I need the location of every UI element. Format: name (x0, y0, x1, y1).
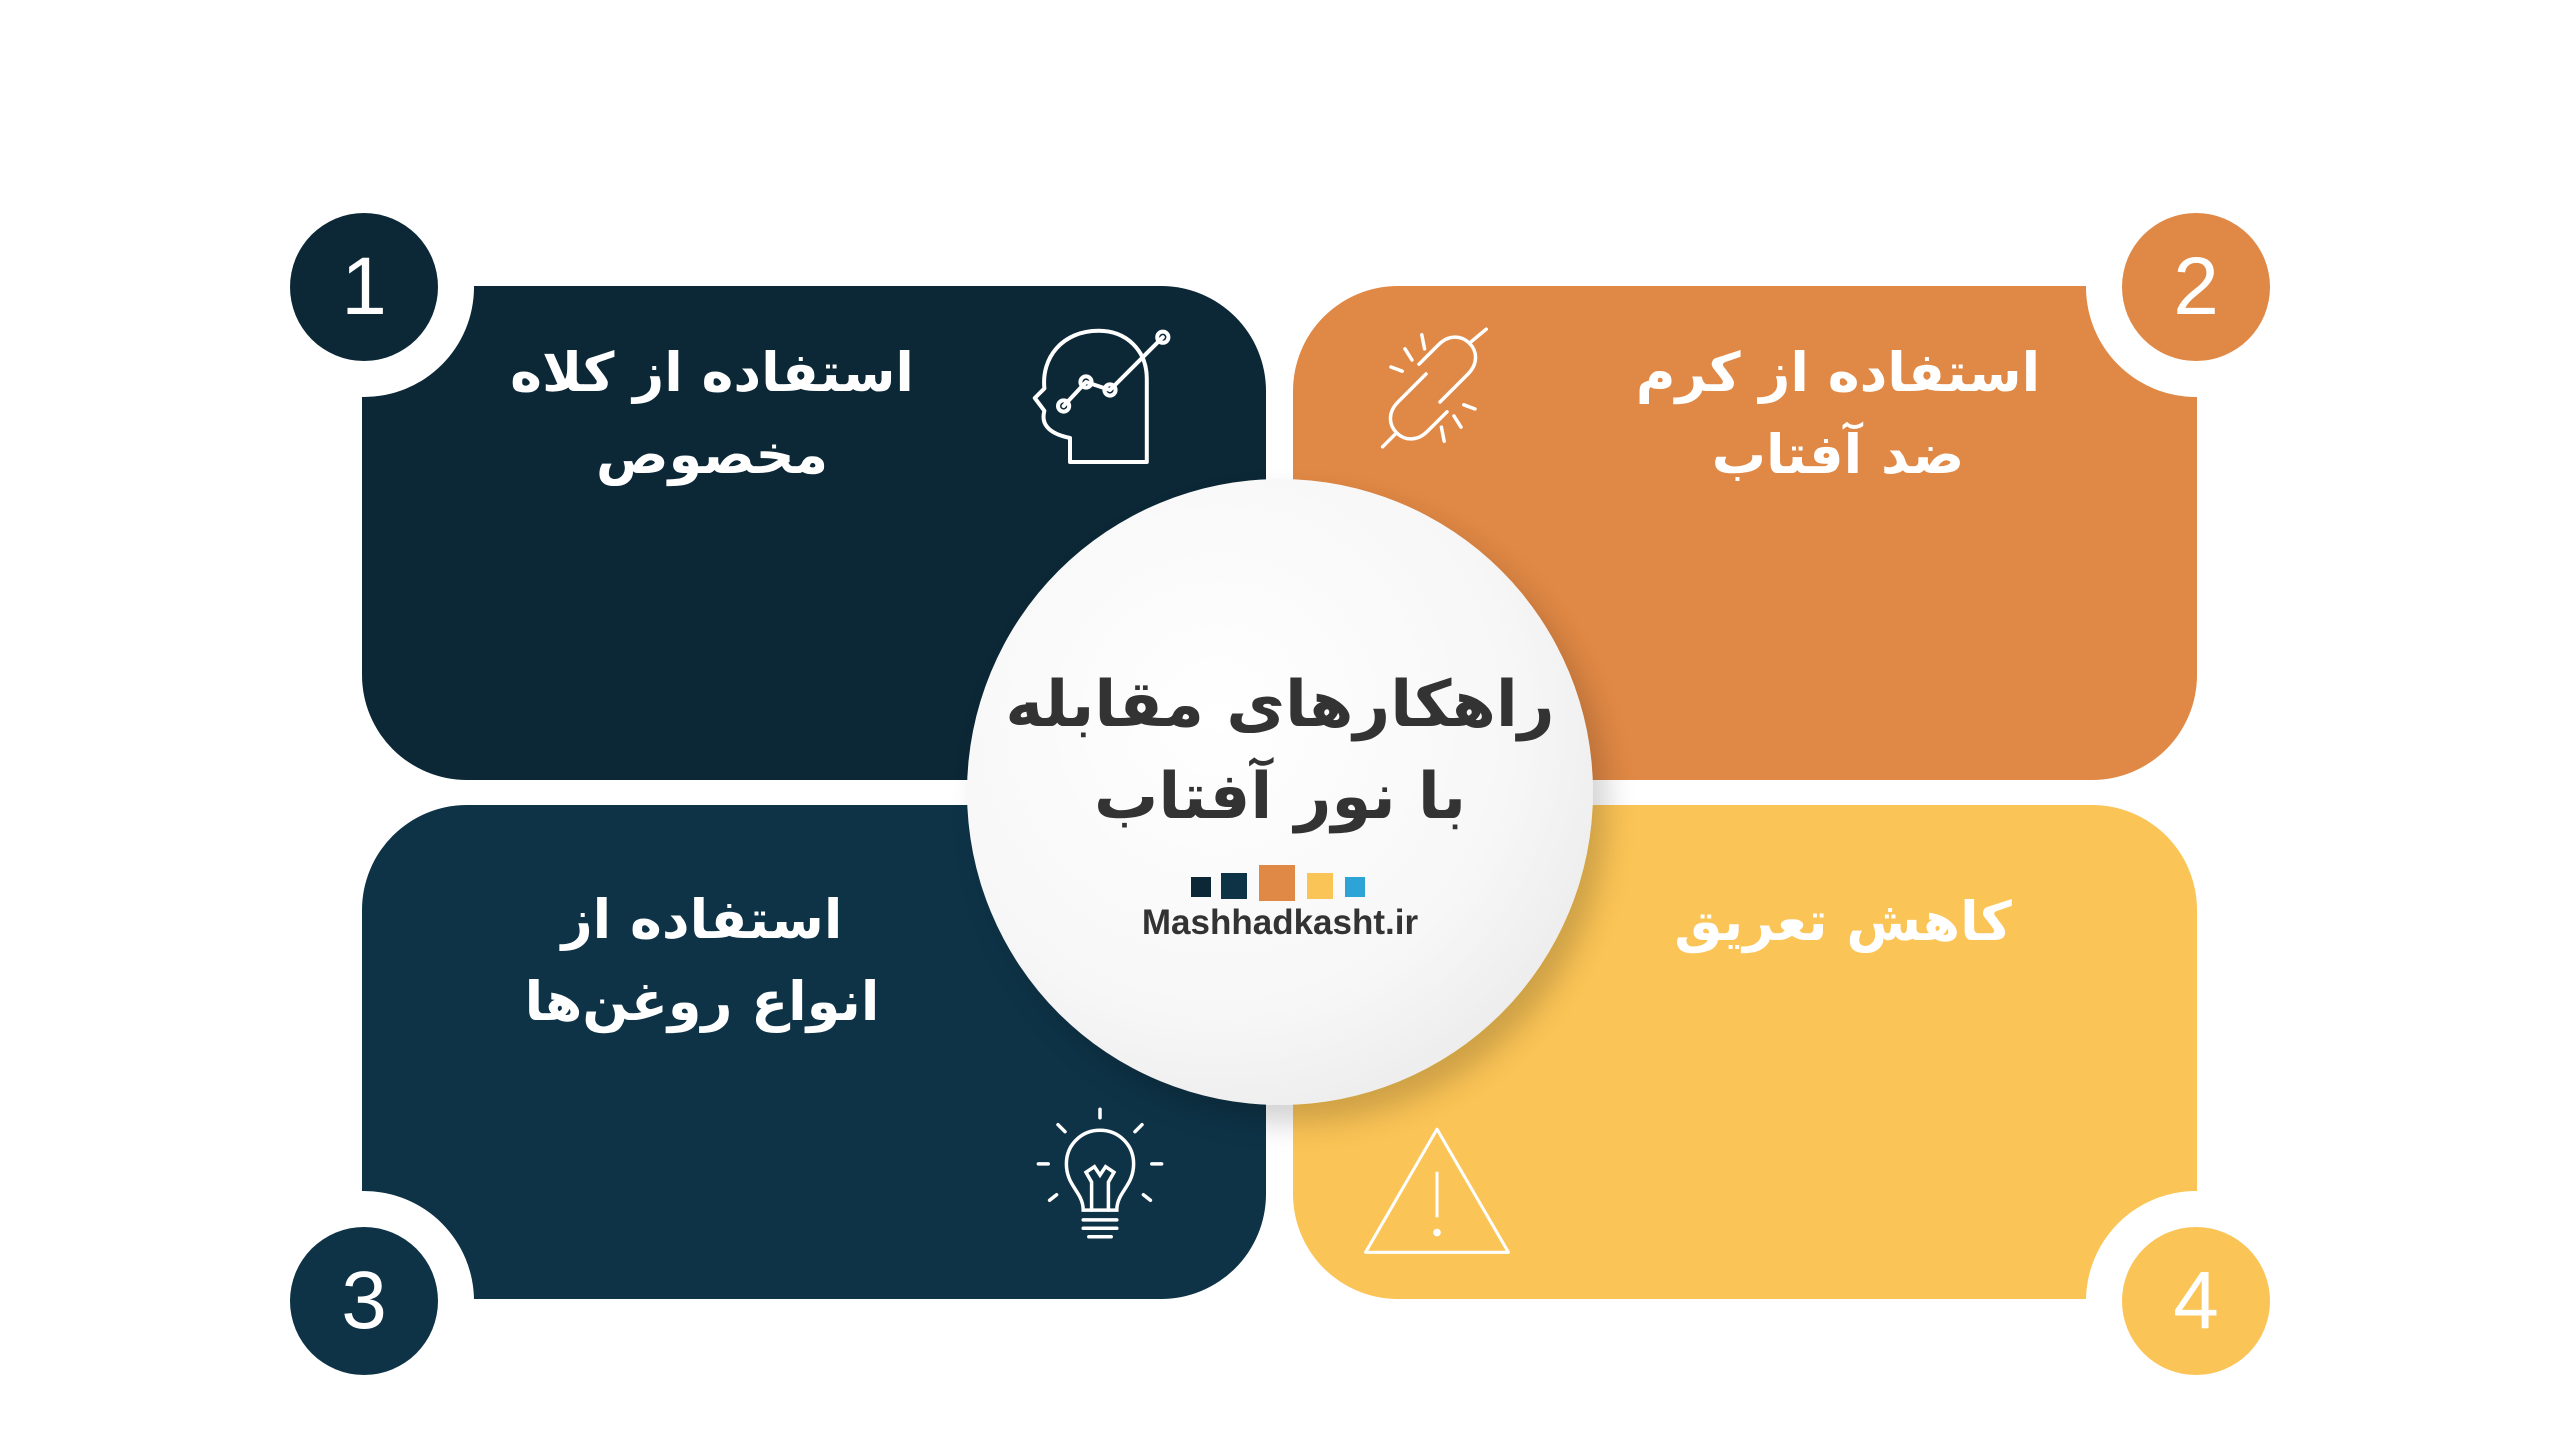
icon: broken link (1380, 327, 1488, 449)
number badge 3: 3 (341, 1255, 387, 1346)
text: sunscreen: استفاده از کرم (1636, 341, 2040, 404)
logo text: Mashhadkasht.ir (1142, 903, 1418, 942)
title text: با نور آفتاب (1094, 760, 1466, 834)
text: oils: استفاده از (562, 888, 842, 951)
center circle: title (967, 479, 1593, 1105)
text: sunscreen: ضد آفتاب (1712, 423, 1964, 486)
text: hat: استفاده از کلاه (510, 341, 914, 404)
text: hat (510, 341, 914, 486)
number badge 2: 2 (2173, 241, 2219, 332)
title text (1005, 668, 1555, 834)
panel: top-left (hat) (362, 286, 1266, 780)
panel: bottom-right (sweating) (1293, 805, 2197, 1299)
icon: head with chart (1032, 328, 1170, 464)
number badge 1 (290, 213, 474, 397)
text: hat: مخصوص (596, 423, 828, 486)
text: oils (525, 888, 879, 1034)
text: sweating: کاهش تعریق (1674, 890, 2012, 953)
number badge 4 (2086, 1191, 2270, 1375)
panel: bottom-left (oils) (362, 805, 1266, 1299)
number badge 4: 4 (2173, 1255, 2219, 1346)
icon: warning triangle (1364, 1128, 1510, 1254)
number badge 1: 1 (341, 241, 387, 332)
number badge 2 (2086, 213, 2270, 397)
panel: top-right (sunscreen) (1293, 286, 2197, 780)
logo squares (1191, 865, 1365, 901)
number badge 3 (290, 1191, 474, 1375)
icon: light bulb (1036, 1108, 1164, 1238)
title text: راهکارهای مقابله (1005, 668, 1555, 742)
text: sunscreen (1636, 341, 2040, 486)
text: oils: انواع روغن‌ها (525, 970, 879, 1033)
